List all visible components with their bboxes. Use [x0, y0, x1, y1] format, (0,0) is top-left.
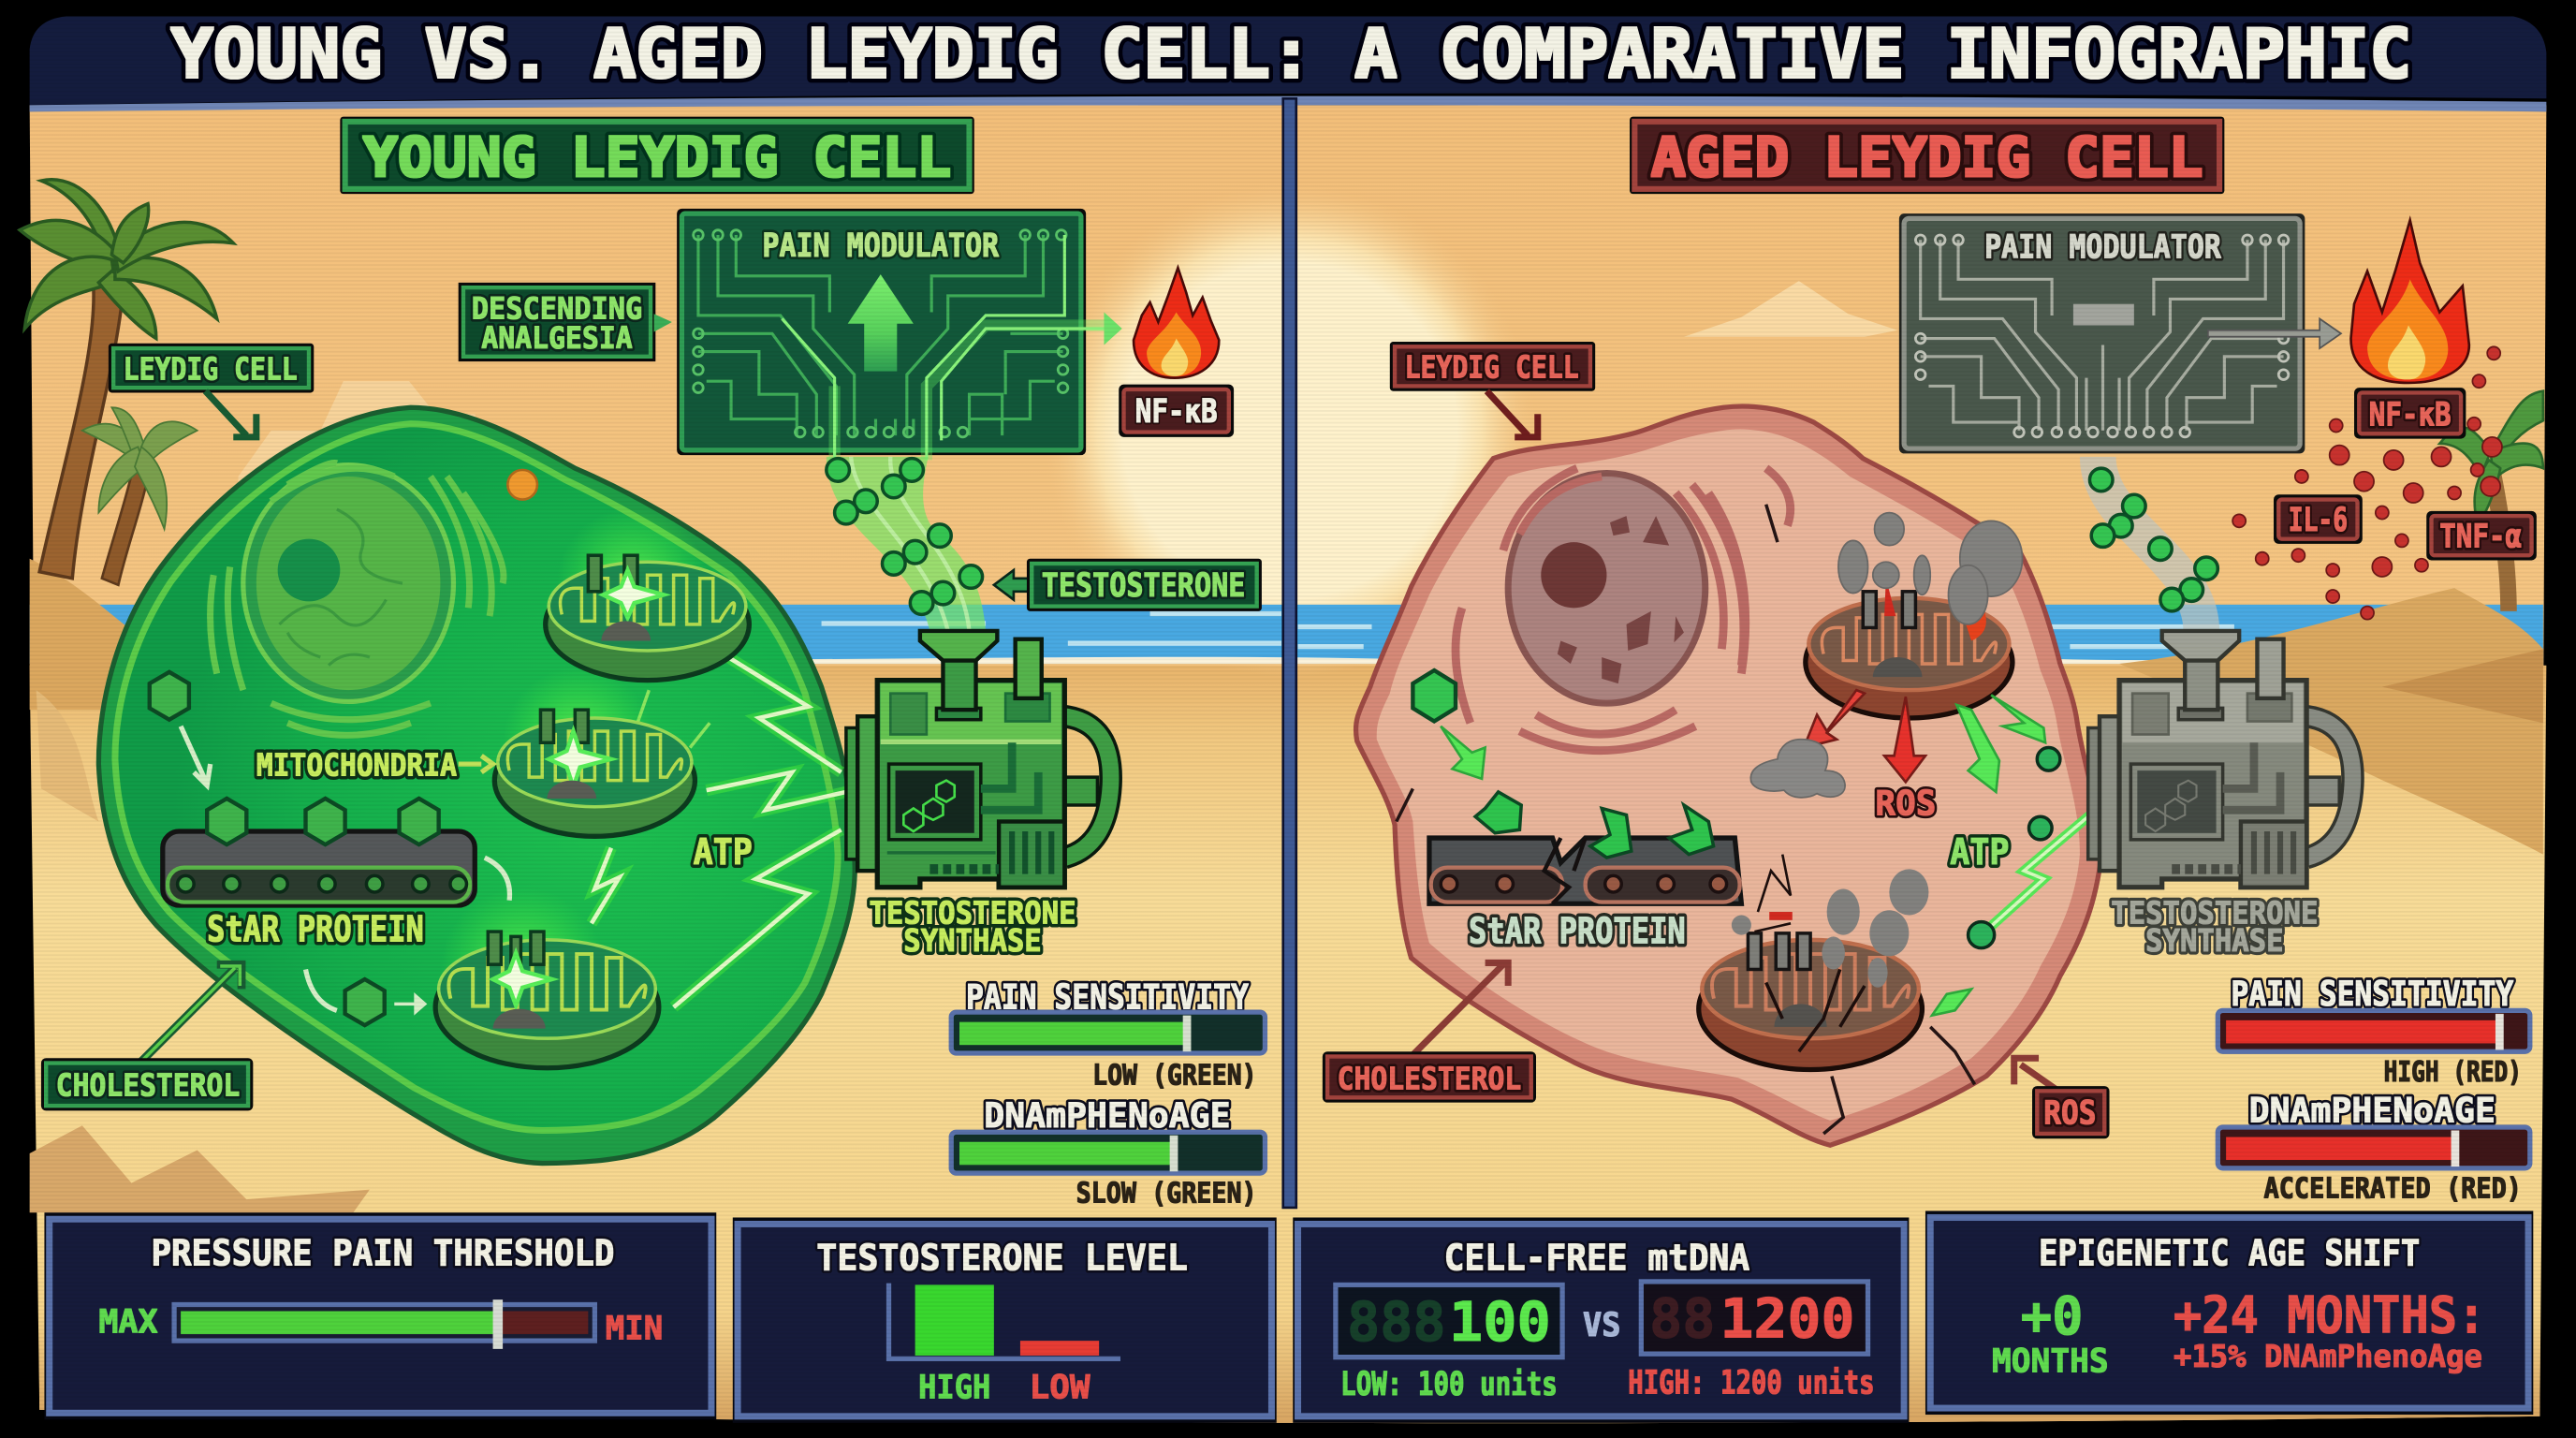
- label: TNF-alpha: TNF-α: [2439, 517, 2522, 555]
- broken ATP bolts: [1932, 695, 2098, 1016]
- burnt mitochondrion 2: [1699, 855, 1928, 1070]
- label: cholesterol young: CHOLESTEROL: [56, 1067, 240, 1104]
- gauge caption: ACCELERATED (RED): [2263, 1172, 2522, 1205]
- label high: HIGH: [918, 1369, 990, 1407]
- panel: cell-free mtDNA: [1293, 1217, 1909, 1423]
- digital display low: [1336, 1284, 1562, 1357]
- gauge: DNAmPhenoAge aged: [2217, 1091, 2530, 1205]
- label: pain modulator: PAIN MODULATOR: [1984, 228, 2222, 267]
- aged detail: +15% DNAmPhenoAge: [2174, 1338, 2482, 1374]
- lightning bolts to synthase: [592, 654, 846, 1007]
- label: mitochondria: MITOCHONDRIA: [256, 746, 457, 783]
- label: testosterone synthase aged: [2111, 894, 2318, 959]
- vs: VS: [1583, 1306, 1620, 1344]
- gauge caption: HIGH (RED): [2384, 1056, 2522, 1089]
- label: testosterone synthase: [869, 894, 1076, 959]
- label: NF-kB aged: [2354, 388, 2466, 439]
- panel: epigenetic age shift: [1925, 1211, 2533, 1415]
- digital display high: 88: [1649, 1287, 1715, 1351]
- panel title: CELL-FREE mtDNA: [1444, 1238, 1749, 1280]
- gauge: pain sensitivity young: PAIN SENSITIVITY: [966, 977, 1250, 1018]
- digital display high: 1200: [1720, 1287, 1854, 1351]
- label: ROS aged callout: ROS: [2043, 1093, 2096, 1132]
- heading: young leydig cell: YOUNG LEYDIG CELL: [363, 125, 951, 189]
- mitochondrion 3: [435, 888, 659, 1068]
- palm tree small: [82, 407, 198, 585]
- green arrow aged: [1441, 726, 1486, 779]
- digital display low: 100: [1449, 1290, 1551, 1354]
- label: testosterone synthase: TESTOSTERONE: [869, 894, 1076, 931]
- young leydig cell: [98, 407, 855, 1164]
- label: ROS aged callout: [2014, 1058, 2110, 1138]
- label: leydig cell young: [109, 344, 314, 437]
- stray ATP particles: [1969, 748, 2060, 948]
- green up arrow: [848, 274, 914, 372]
- slider bar: [174, 1299, 594, 1349]
- gauge: DNAmPhenoAge young: [951, 1095, 1265, 1211]
- panel title: PRESSURE PAIN THRESHOLD: [152, 1232, 614, 1274]
- gauge caption: SLOW (GREEN): [1076, 1178, 1257, 1211]
- caption low: LOW: 100 units: [1340, 1365, 1558, 1403]
- arrow from cholesterol to conveyor: [181, 726, 211, 785]
- gauge: pain sensitivity aged: [2217, 974, 2530, 1089]
- smoke: [1838, 513, 2022, 624]
- title: YOUNG VS. AGED LEYDIG CELL: A COMPARATIVE INFOGRAPHIC: [171, 14, 2411, 93]
- flame: aged: [2351, 220, 2469, 383]
- gauge: pain sensitivity young: [951, 977, 1265, 1092]
- nucleus aged: [1456, 468, 1791, 751]
- grey arrow to NF-kB: [2208, 318, 2341, 348]
- label: testosterone young: TESTOSTERONE: [1042, 566, 1245, 605]
- panel: testosterone level: [733, 1217, 1277, 1423]
- burnt mitochondrion 1: [1806, 579, 2012, 718]
- mitochondrion 2: [494, 668, 695, 836]
- label: descending analgesia: DESCENDING: [472, 292, 642, 326]
- centre divider: [1283, 98, 1296, 1208]
- label: testosterone synthase aged: SYNTHASE: [2145, 922, 2284, 959]
- palm tree large: [20, 180, 233, 579]
- pain modulator board: young: [677, 209, 1122, 460]
- curved arrow, hexagon, arrow: to mitochondrion 3: [305, 858, 509, 1025]
- cracks: [1397, 505, 1975, 1134]
- glowing circuit trace with arrow to NF-kB: [782, 235, 1122, 460]
- testosterone stream: young: [827, 457, 986, 631]
- label: ROS inside cell: ROS: [1875, 783, 1936, 823]
- bar chart: [889, 1284, 1120, 1358]
- digital display low: 888: [1347, 1290, 1445, 1354]
- cholesterol hexagon aged: [1412, 670, 1456, 721]
- label: TNF-alpha: [2426, 511, 2537, 560]
- label: NF-kB aged: NF-κB: [2369, 396, 2452, 434]
- broken conveyor: StAR protein: [1429, 792, 1741, 903]
- testosterone synthase machine: young: [846, 631, 1111, 959]
- digital display high: [1641, 1282, 1868, 1354]
- heading: aged leydig cell: AGED LEYDIG CELL: [1651, 125, 2203, 189]
- label: leydig cell aged: LEYDIG CELL: [1405, 349, 1579, 386]
- gauge caption: LOW (GREEN): [1092, 1059, 1257, 1092]
- gauge: pain sensitivity aged: PAIN SENSITIVITY: [2231, 974, 2514, 1014]
- label min: MIN: [606, 1309, 663, 1347]
- caption high: HIGH: 1200 units: [1628, 1363, 1875, 1401]
- label: leydig cell aged: [1390, 342, 1595, 437]
- mitochondrion 1: [546, 507, 749, 681]
- label: cholesterol aged: CHOLESTEROL: [1338, 1061, 1521, 1097]
- label: ATP aged: ATP: [1950, 831, 2009, 873]
- testosterone synthase machine: aged: [2088, 631, 2352, 959]
- label: cholesterol aged: [1323, 962, 1536, 1103]
- label: leydig cell young: LEYDIG CELL: [124, 350, 298, 387]
- label: IL-6: [2274, 494, 2363, 544]
- gauge: DNAmPhenoAge aged: DNAmPHENoAGE: [2249, 1091, 2496, 1131]
- label: testosterone young: [994, 559, 1262, 611]
- label max: MAX: [98, 1302, 158, 1341]
- label: cholesterol young: [41, 964, 253, 1110]
- label: NF-kB young: NF-κB: [1135, 392, 1218, 431]
- label: ATP: ATP: [694, 831, 753, 873]
- label: descending analgesia: [459, 283, 672, 361]
- nucleus: [211, 463, 537, 735]
- label: IL-6: IL-6: [2289, 501, 2348, 539]
- panel title: TESTOSTERONE LEVEL: [816, 1238, 1188, 1280]
- label: StAR protein aged: StAR PROTEIN: [1469, 910, 1686, 952]
- label: testosterone synthase aged: TESTOSTERONE: [2111, 894, 2318, 931]
- gauge: DNAmPhenoAge young: DNAmPHENoAGE: [984, 1095, 1231, 1136]
- cholesterol hexagon: [150, 672, 189, 720]
- label: pain modulator: PAIN MODULATOR: [762, 227, 1000, 265]
- flat indicator: [2073, 304, 2134, 325]
- label: descending analgesia: ANALGESIA: [481, 322, 633, 356]
- palm tree right: [2439, 391, 2543, 611]
- pain modulator board: aged: [1899, 213, 2341, 453]
- testosterone stream: aged: [2089, 457, 2217, 631]
- conveyor: StAR protein: [163, 799, 475, 905]
- label: testosterone synthase: SYNTHASE: [903, 922, 1042, 959]
- aged value: +24 MONTHS:: [2174, 1285, 2485, 1344]
- label low: LOW: [1030, 1369, 1090, 1407]
- title bar: [30, 14, 2546, 111]
- young value: +0: [2021, 1286, 2083, 1347]
- ROS arrows and smoke cloud: [1750, 690, 1925, 798]
- panel title: EPIGENETIC AGE SHIFT: [2039, 1232, 2420, 1274]
- inflammatory particles: [2232, 346, 2502, 620]
- label: StAR protein: StAR PROTEIN: [207, 909, 424, 951]
- young unit: MONTHS: [1992, 1342, 2109, 1380]
- aged leydig cell: [1355, 406, 2101, 1145]
- panel: pressure pain threshold: [44, 1212, 716, 1419]
- label: NF-kB young: [1119, 385, 1234, 437]
- flame: young: [1134, 268, 1219, 378]
